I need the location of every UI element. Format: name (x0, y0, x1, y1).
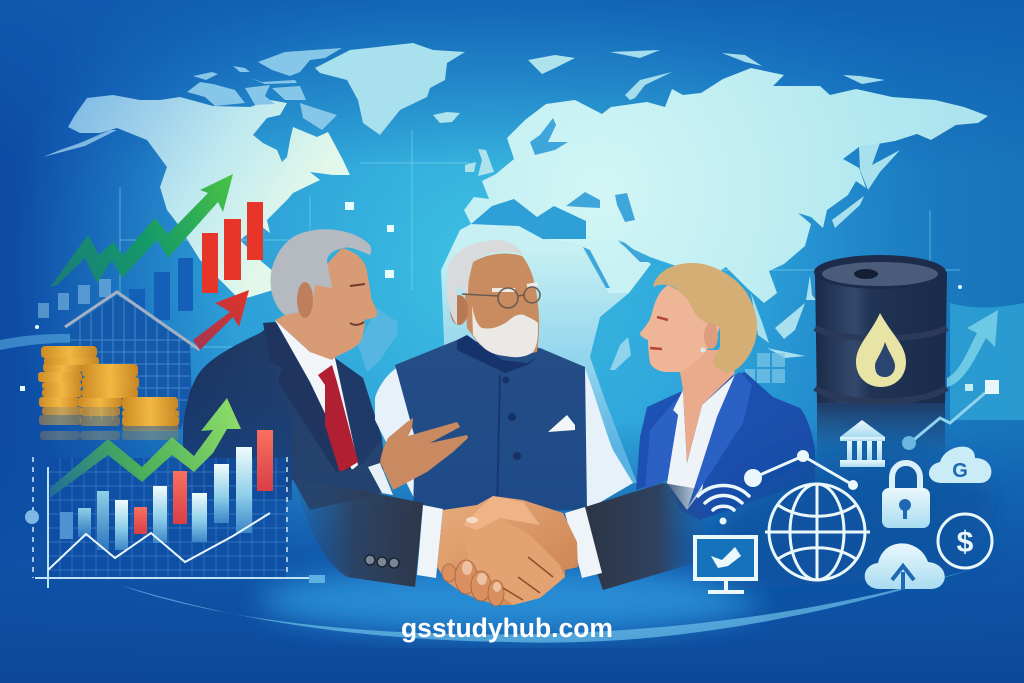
icon: padlock (882, 463, 930, 528)
sleeve and cuff left (295, 480, 443, 587)
map: Svalbard (528, 55, 575, 74)
jacket (636, 372, 815, 520)
map: Britain and Ireland (465, 149, 494, 176)
hand (380, 418, 468, 490)
buttons (365, 555, 399, 568)
thumb nail (466, 517, 478, 523)
hair (447, 240, 523, 325)
chart: axis marker (309, 575, 325, 583)
gold coins (38, 346, 179, 440)
chart: red bars (134, 430, 273, 534)
chart: axes (35, 467, 310, 588)
map: South America (358, 308, 398, 372)
map: Madagascar (610, 337, 631, 370)
kurta (375, 360, 633, 510)
man left (183, 229, 385, 500)
pocket square (548, 415, 575, 432)
coin stack 2 (78, 364, 139, 440)
lapel right (335, 358, 382, 465)
icons panel shade (720, 450, 995, 590)
icon: house with grid (65, 292, 200, 430)
chart: grid panel (46, 458, 286, 578)
ear (704, 323, 718, 349)
website label: gsstudyhub.com (401, 613, 613, 643)
icon: cloud (929, 447, 991, 483)
arrow: pale upper (947, 310, 998, 387)
mandarin collar (457, 335, 537, 373)
finger lines (503, 557, 553, 600)
icon: network links (744, 450, 858, 490)
brow and smile (350, 284, 365, 325)
chart: axis dot (25, 510, 39, 524)
vest (395, 340, 587, 512)
background network grid (50, 130, 960, 347)
barrel top (814, 255, 946, 289)
thumb (463, 496, 540, 530)
vest placket (497, 375, 500, 510)
light swooshes (0, 303, 1024, 420)
neck and face (275, 248, 377, 360)
icon: upload cloud (865, 543, 945, 590)
vest buttons (502, 376, 521, 460)
chart: pale bars (60, 447, 252, 550)
sleeve (292, 467, 382, 510)
fingers (442, 560, 504, 606)
barrel reflection (817, 403, 945, 470)
arrow: green up arrow (50, 174, 233, 287)
map: Arctic islands (187, 48, 342, 130)
icon: monitor (695, 537, 756, 592)
ear (450, 295, 468, 325)
icon text: cloud letter: G (952, 460, 968, 482)
woman right (636, 263, 815, 520)
map: Iceland (433, 112, 460, 123)
hand back (462, 518, 565, 605)
map: Africa (441, 224, 637, 483)
technology icons (695, 420, 992, 592)
cuff (417, 505, 443, 578)
lapel (688, 372, 752, 507)
barrel (814, 255, 947, 470)
coin stack 3 (122, 397, 179, 440)
blouse (667, 375, 735, 510)
map: North America (68, 95, 350, 300)
arrow: network line (910, 387, 992, 443)
map: Greenland (315, 43, 465, 135)
hair (653, 263, 757, 373)
icon text: dollar: $ (957, 526, 974, 559)
map: Asian islands (751, 143, 900, 358)
grid squares behind woman (745, 353, 785, 383)
arrow: green up arrow (50, 398, 241, 498)
lapel left (263, 322, 358, 475)
handshake (437, 496, 578, 606)
network dots (20, 202, 962, 391)
upper chart (38, 174, 263, 430)
barrel body (815, 272, 947, 403)
face (465, 254, 539, 357)
chart: pale bars (38, 279, 111, 318)
bottom arc (120, 560, 1000, 643)
chart: white line (48, 513, 270, 570)
arrow: red up arrow (193, 290, 249, 350)
map: Eurasia (464, 68, 988, 330)
suit body (183, 322, 385, 500)
ear (297, 282, 313, 318)
lower chart (25, 398, 325, 588)
hair (271, 229, 371, 315)
beard (472, 305, 538, 357)
map: Alaska peninsula (43, 130, 117, 157)
arrows right (902, 310, 999, 450)
neck and chest (680, 350, 735, 463)
chart: blue bars (129, 258, 193, 320)
glasses (462, 287, 540, 308)
shirt (275, 320, 358, 470)
sleeve and cuff right (565, 483, 705, 590)
tie (318, 365, 358, 473)
world map (43, 43, 988, 483)
face (640, 285, 720, 372)
finger nails (462, 561, 501, 592)
icon: bank (840, 420, 885, 467)
lips and eye (650, 317, 668, 349)
sleeve (295, 480, 423, 587)
man centre (375, 240, 633, 512)
earring (700, 348, 706, 352)
map: Northern islands (610, 50, 885, 100)
left man gesturing hand (292, 418, 468, 510)
cuff (368, 463, 393, 495)
hands base (437, 496, 578, 605)
icon: globe (765, 484, 870, 580)
icon: oil drop (856, 313, 906, 387)
icon: dollar circle (938, 514, 992, 568)
map: inland seas (530, 118, 650, 288)
coin stack 1 (38, 346, 99, 440)
barrel hoops (815, 328, 947, 402)
suit fade (183, 333, 292, 500)
eyebrows (492, 284, 538, 290)
chart: red bars (202, 202, 263, 293)
icon: wifi (698, 486, 749, 524)
map: blue sea overlay (471, 199, 586, 239)
